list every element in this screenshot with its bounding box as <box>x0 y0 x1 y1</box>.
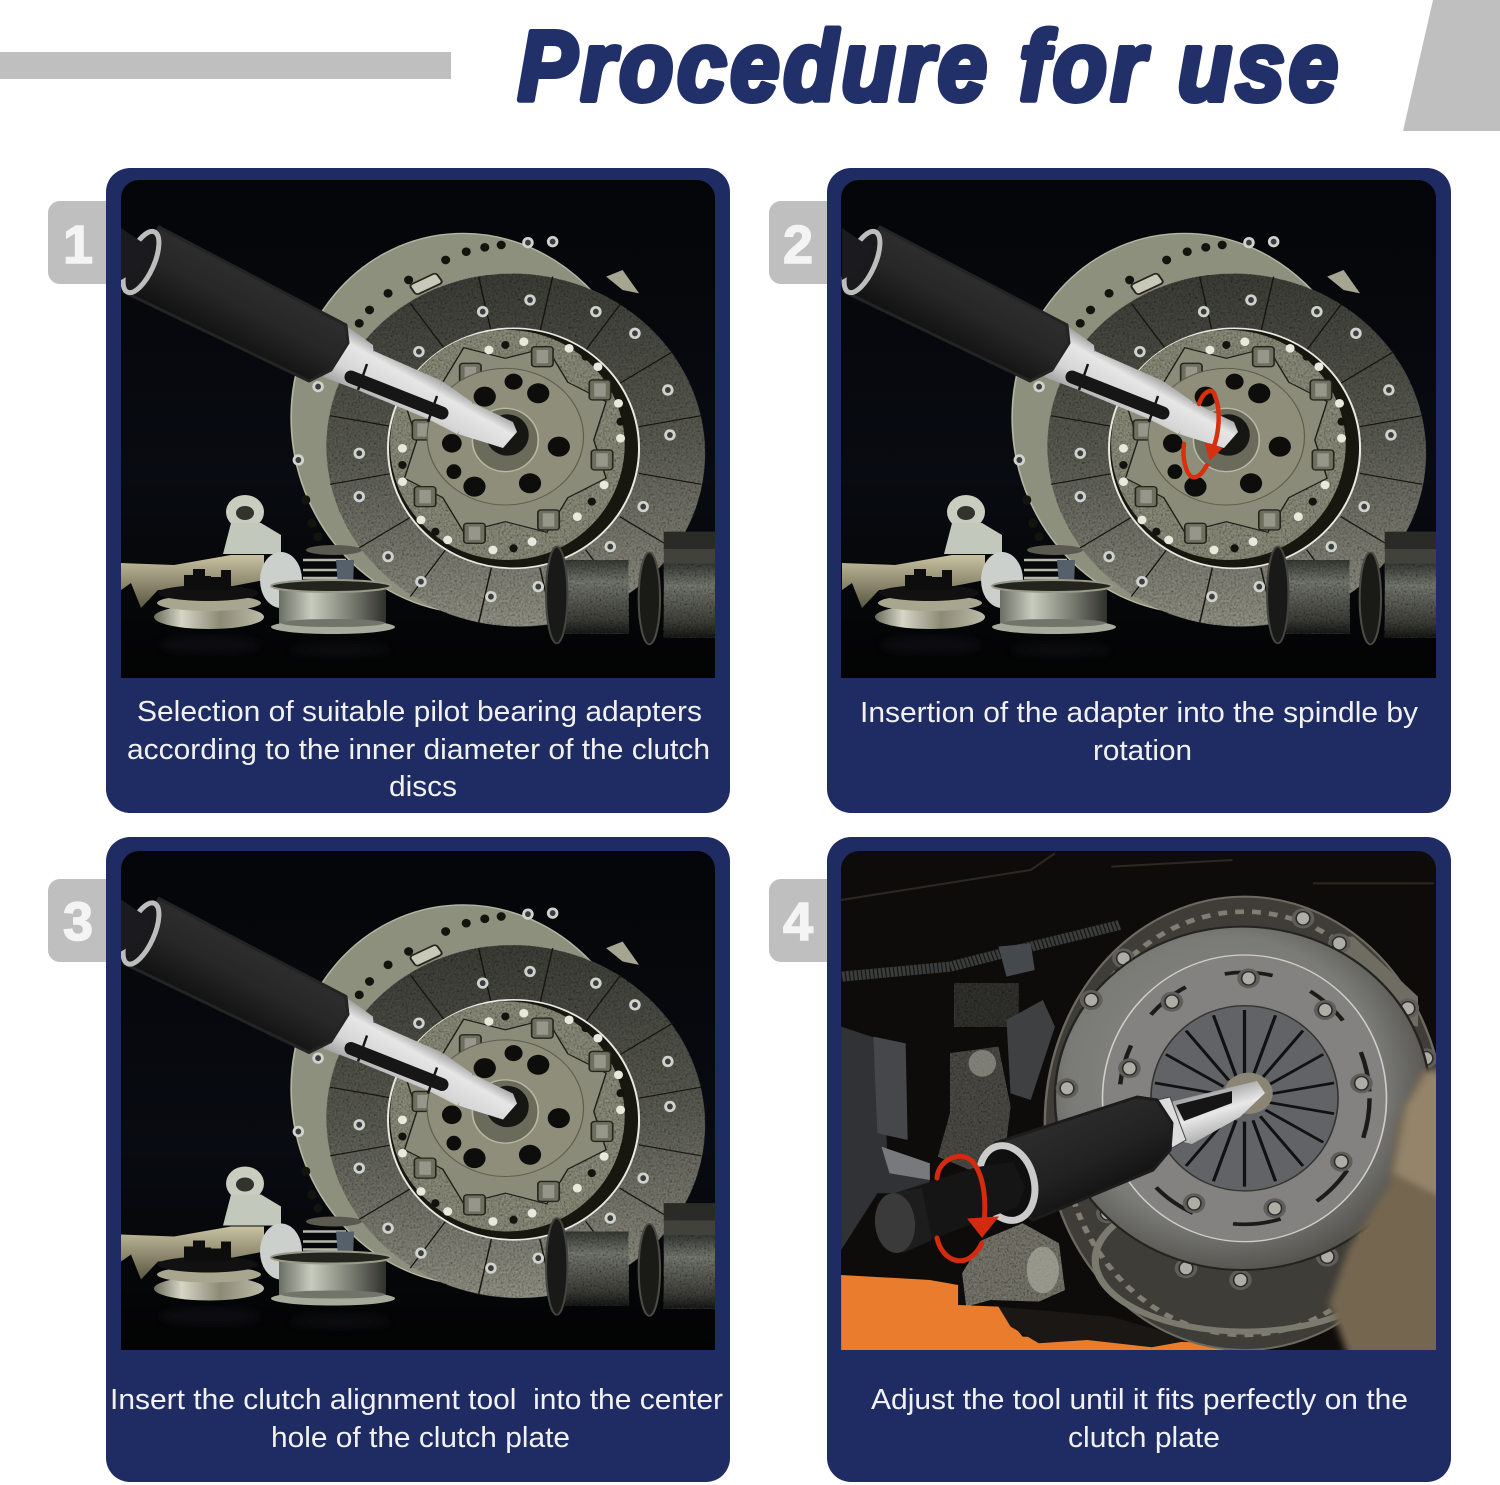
icon: red rotation arrow <box>1183 391 1222 477</box>
step badge 3 <box>48 879 118 962</box>
step badge 4: 4 <box>783 892 813 952</box>
icon: red rotation arrow <box>937 1156 998 1261</box>
caption: step 2 <box>860 697 1419 767</box>
caption: step 2: rotation <box>1093 735 1192 767</box>
header shape: right grey parallelogram <box>1403 0 1500 131</box>
caption: step 1: Selection of suitable pilot bearing adapters <box>137 696 702 728</box>
caption: step 2: Insertion of the adapter into the spindle by <box>860 697 1419 729</box>
photo: tool in clutch disc with rotation <box>821 170 1463 680</box>
caption: step 4: Adjust the tool until it fits perfectly on the <box>871 1384 1408 1416</box>
photo: tool in clutch disc <box>100 170 742 680</box>
step badge 2: 2 <box>783 215 813 275</box>
caption: step 1: according to the inner diameter of the clutch <box>127 734 710 766</box>
tool: clutch alignment tool <box>872 1081 1265 1255</box>
caption: step 1: discs <box>389 771 457 803</box>
step badge 3: 3 <box>63 892 93 952</box>
header bar: left grey stripe <box>0 52 451 79</box>
photo: tool in clutch plate <box>100 842 742 1351</box>
step badge 1: 1 <box>63 215 93 275</box>
caption: step 3 <box>110 1384 723 1454</box>
panel: step 3 <box>100 837 742 1482</box>
panel: step 1 <box>100 168 742 813</box>
caption: step 1 <box>127 696 710 803</box>
step badge 2 <box>769 201 839 284</box>
step badge 4 <box>769 879 839 962</box>
photo: tool on installed clutch <box>829 840 1458 1360</box>
panel: step 2 <box>821 168 1463 813</box>
caption: step 4 <box>871 1384 1408 1454</box>
caption: step 3: hole of the clutch plate <box>271 1422 570 1454</box>
title: Procedure for use <box>518 12 1338 121</box>
step badge 1 <box>48 201 118 284</box>
caption: step 4: clutch plate <box>1068 1422 1220 1454</box>
caption: step 3: Insert the clutch alignment tool into the center <box>110 1384 723 1416</box>
panel: step 4 <box>827 837 1458 1482</box>
